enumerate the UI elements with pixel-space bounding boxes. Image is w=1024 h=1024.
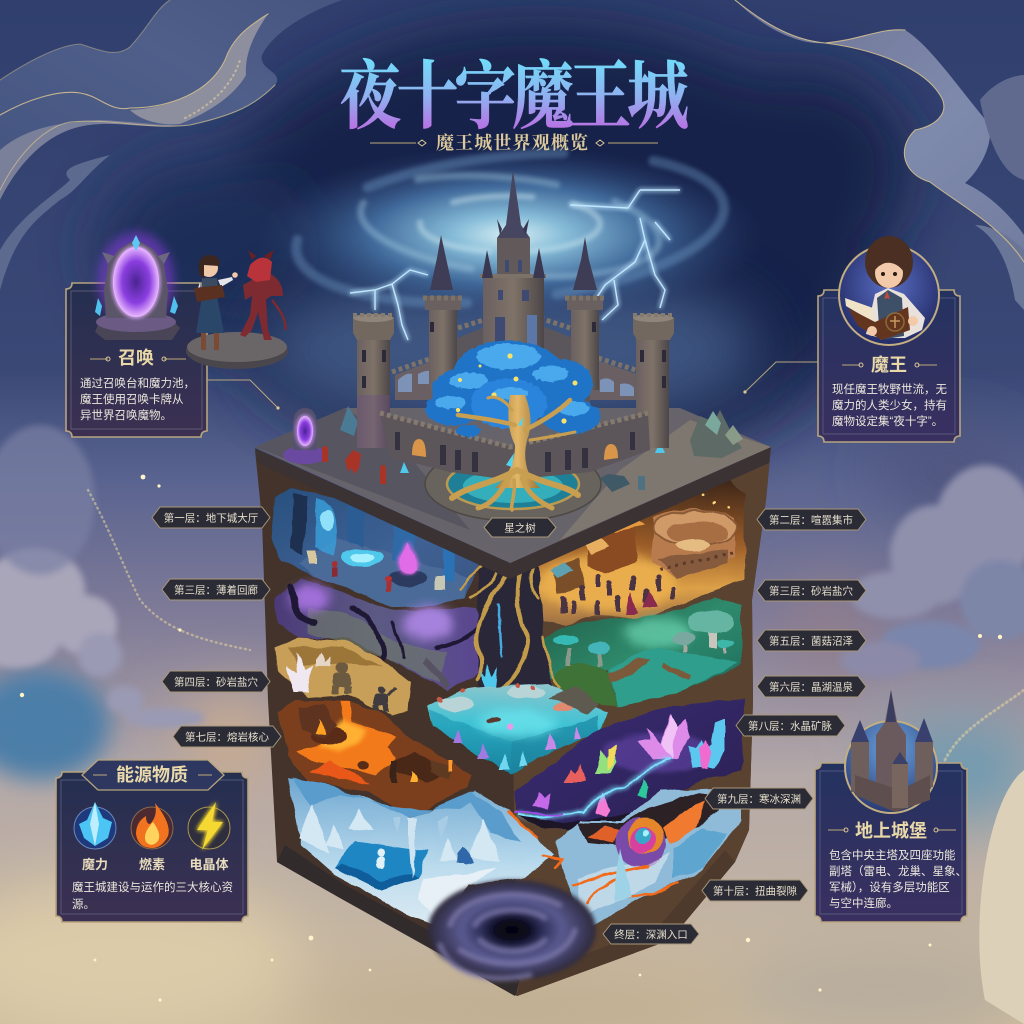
heading: surface castle: 地上城堡 — [855, 820, 927, 841]
figures: girl and demon on stone platform — [186, 250, 288, 369]
label: floor 5 — [757, 630, 866, 651]
label: floor 3 right: 第三层：砂岩盐穴 — [769, 584, 853, 598]
icon: castle medallion — [845, 690, 937, 813]
label: floor 7: 第七层：熔岩核心 — [185, 730, 269, 744]
heading: demon king — [842, 354, 937, 375]
label: floor 1: 第一层：地下城大厅 — [164, 512, 258, 524]
icon labels: 魔力 — [82, 857, 108, 872]
label: floor 2 — [757, 509, 866, 530]
label: floor 3 left: 第三层：薄着回廊 — [174, 584, 258, 596]
leader line: summon — [207, 380, 280, 410]
text: demon king description — [832, 382, 947, 428]
layer 7: lava core — [280, 703, 473, 817]
panel: demon king — [818, 236, 960, 442]
heading: surface castle — [828, 820, 956, 841]
cube interior layers — [273, 480, 747, 933]
label: floor 5: 第五层：菌菇沼泽 — [769, 634, 853, 648]
central keep — [480, 170, 546, 350]
small demons on the plateau — [322, 446, 386, 484]
icon: summoning portal — [95, 232, 180, 340]
text: summon description: 通过召唤台和魔力池， — [80, 376, 195, 390]
label: star tree — [484, 518, 556, 537]
label: final floor — [603, 924, 699, 944]
label: floor 10 — [702, 880, 808, 901]
layer 9: frozen abyss — [290, 780, 557, 930]
left blue pocket — [0, 670, 110, 780]
label: floor 6: 第六层：晶湖温泉 — [769, 680, 853, 694]
text: energy description: 源。 — [72, 897, 95, 911]
icon labels — [82, 857, 229, 872]
subtitle — [370, 132, 658, 153]
leader line: demon king — [743, 362, 818, 394]
icon: mana crystal — [74, 802, 116, 849]
panel: surface castle — [815, 690, 967, 922]
icon labels: 燃素 — [139, 857, 165, 872]
root cavern and golden roots — [462, 560, 562, 695]
label: floor 8: 第八层：水晶矿脉 — [748, 720, 832, 732]
label: floor 3 left — [162, 579, 270, 600]
layer 5: mushroom swamp — [543, 600, 743, 710]
icon: lightning bolts — [350, 190, 680, 340]
text: surface castle description: 与空中连廊。 — [829, 896, 898, 910]
label: floor 6 — [757, 676, 866, 697]
text: energy description — [72, 880, 233, 911]
label: final floor: 终层：深渊入口 — [614, 928, 688, 941]
text: surface castle description: 军械），设有多层功能区 — [829, 880, 950, 894]
label: floor 9 — [705, 788, 813, 809]
title: 夜十字魔王城 — [339, 56, 689, 138]
label: floor 1 — [152, 507, 270, 528]
outer towers — [353, 314, 674, 448]
icon: lightning crystal — [188, 802, 230, 850]
icon: girl portrait with book — [839, 236, 939, 345]
label: floor 3 right — [757, 580, 866, 601]
layer 6: crystal lake hot springs — [430, 685, 610, 777]
label: floor 9: 第九层：寒冰深渊 — [717, 792, 801, 806]
text: surface castle description: 副塔（雷电、龙巢、星象、 — [829, 865, 967, 878]
label: floor 10: 第十层：扭曲裂隙 — [713, 884, 797, 898]
layer 4: sandstone salt cave — [277, 640, 413, 717]
text: energy description: 魔王城建设与运作的三大核心资 — [72, 880, 233, 894]
label: floor 2: 第二层：喧嚣集市 — [769, 514, 853, 526]
layer 3: twisted corridor — [277, 580, 483, 693]
label: floor 8 — [736, 715, 845, 736]
text: demon king description: 现任魔王牧野世流，无 — [832, 382, 947, 396]
panel: energy substances — [56, 760, 248, 922]
text: surface castle description — [829, 848, 967, 910]
heading: summon: 召唤 — [118, 348, 154, 368]
heading: energy substances — [82, 760, 224, 790]
label: floor 4 — [162, 671, 270, 692]
heading: summon — [90, 348, 186, 368]
text: summon description: 魔王使用召唤卡牌从 — [80, 392, 184, 406]
text: summon description — [80, 376, 195, 422]
star tree — [427, 342, 602, 510]
layer 1: dungeon hall — [273, 490, 483, 610]
text: summon description: 异世界召唤魔物。 — [80, 408, 172, 422]
layer 10: twisted rift — [510, 790, 743, 933]
text: surface castle description: 包含中央主塔及四座功能 — [829, 848, 956, 862]
panel: summon — [66, 232, 207, 437]
label: floor 4: 第四层：砂岩盐穴 — [174, 676, 258, 688]
icon: flame — [131, 803, 173, 849]
background: storm vortex behind the castle — [255, 134, 765, 435]
heading: demon king: 魔王 — [871, 354, 907, 375]
icon labels: 电晶体 — [189, 857, 229, 872]
text: demon king description: 魔力的人类少女，持有 — [832, 398, 947, 412]
layer 11: abyss entrance vortex — [428, 880, 596, 980]
subtitle: 魔王城世界观概览 — [436, 132, 588, 153]
front walls — [380, 413, 650, 480]
heading: energy substances: 能源物质 — [116, 764, 188, 785]
top plateau — [255, 406, 771, 579]
text: demon king description: 魔物设定集“夜十字”。 — [832, 414, 943, 428]
small portal on the plateau — [283, 408, 327, 464]
layer 8: crystal vein — [515, 700, 747, 832]
castle — [353, 170, 674, 480]
label: floor 7 — [173, 726, 281, 747]
layer 2: bustling market — [530, 480, 747, 627]
back walls — [392, 318, 642, 420]
label: star tree: 星之树 — [504, 522, 536, 534]
isometric cube: rock body — [255, 447, 771, 996]
inner towers — [423, 235, 605, 390]
